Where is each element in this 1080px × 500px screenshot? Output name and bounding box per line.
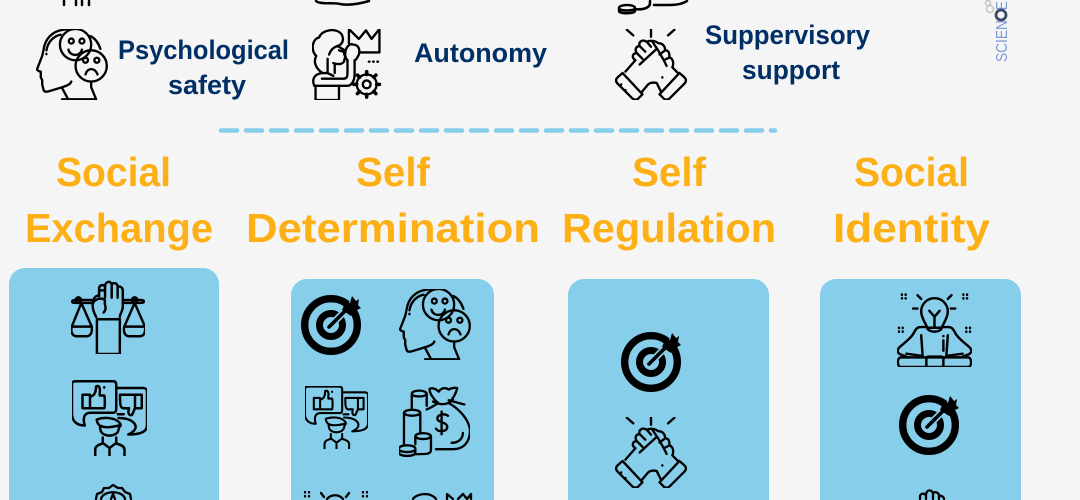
heading: social identity (833, 149, 990, 251)
label: supervisory support: support (742, 55, 840, 85)
icon: autonomy (313, 29, 379, 100)
icon: feedback (305, 387, 368, 449)
heading: self determination (246, 149, 540, 251)
panel: self determination (291, 279, 494, 500)
label: supervisory support (705, 20, 870, 85)
label: autonomy: Autonomy (414, 38, 547, 68)
icon: goal target (625, 333, 681, 388)
heading: social identity: Identity (833, 205, 990, 251)
heading: social exchange: Exchange (25, 205, 213, 251)
label: psychological safety (118, 35, 289, 100)
heading: self regulation: Self (632, 149, 706, 195)
logo: science (986, 0, 1011, 62)
label: psychological safety: Psychological (118, 35, 289, 65)
heading: self regulation (562, 149, 776, 251)
heading: social identity: Social (854, 149, 969, 195)
icon: supervisory support (616, 29, 686, 100)
icon: feedback (72, 381, 147, 456)
icon: mindfulness (898, 294, 971, 367)
icon: award badge (cropped) (96, 485, 131, 499)
icon: goal target (903, 396, 959, 451)
heading: self determination: Self (356, 149, 430, 195)
cropped icon row at top of page (64, 1, 687, 13)
icon: money (399, 388, 470, 456)
heading: social exchange: Social (56, 149, 171, 195)
panel: self regulation (568, 279, 769, 500)
heading: social exchange (25, 149, 213, 251)
icon: autonomy (cropped) (413, 494, 471, 499)
icon: fairness scales (cropped) (920, 490, 944, 499)
icon: fairness scales (71, 282, 145, 354)
icon: supervisory support (616, 417, 686, 488)
icon: psychological safety (400, 289, 470, 359)
icon: psychological safety (37, 29, 107, 99)
label: psychological safety: safety (168, 70, 246, 100)
label: supervisory support: Suppervisory (705, 20, 870, 50)
panel: social exchange (9, 268, 219, 500)
heading: self determination: Determination (246, 205, 540, 251)
panel: social identity (820, 279, 1021, 500)
icon: goal target (305, 296, 361, 351)
icon: mindfulness (cropped) (305, 492, 367, 499)
heading: self regulation: Regulation (562, 205, 776, 251)
